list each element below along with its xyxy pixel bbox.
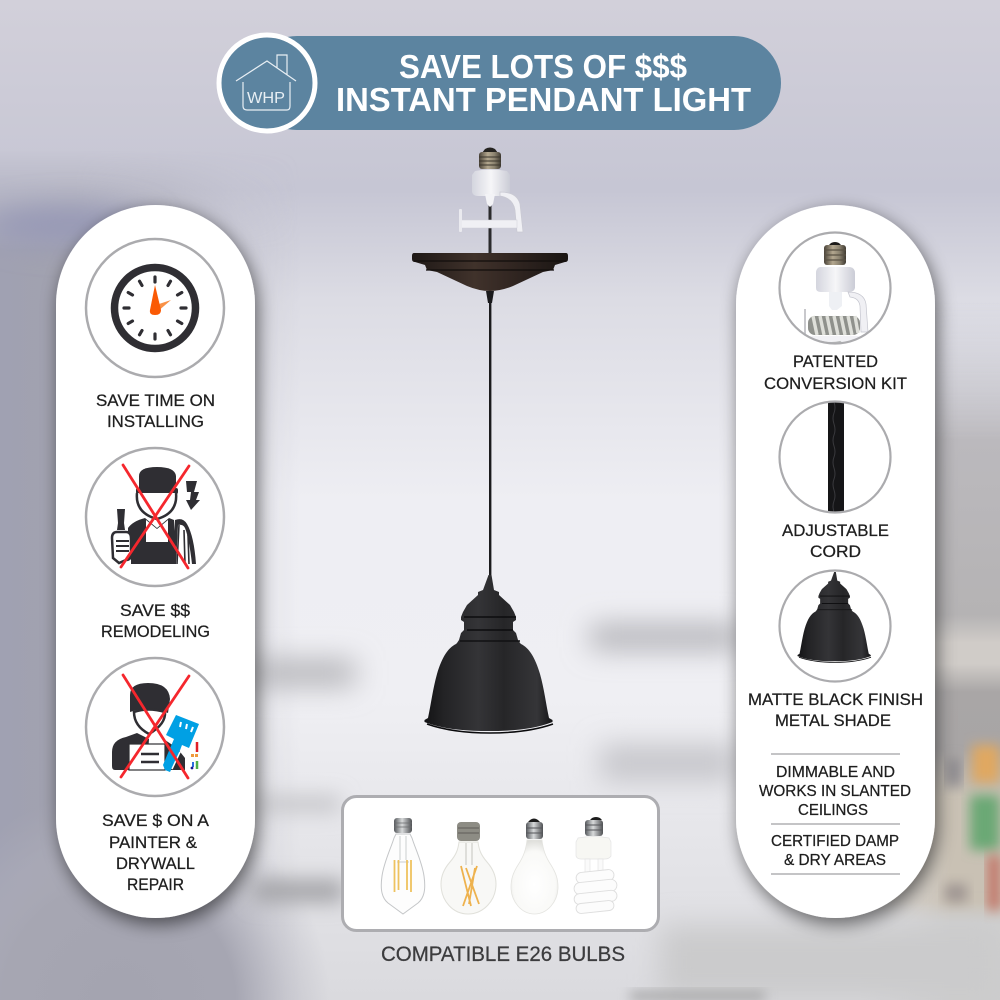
icon: frosted bulb (511, 818, 558, 914)
text: conversion kit: CONVERSION KIT (764, 374, 907, 393)
panel background (56, 205, 255, 918)
text: save remodeling: REMODELING (101, 622, 210, 641)
text: save time: SAVE TIME ON (96, 391, 215, 410)
text: conversion kit (764, 352, 907, 393)
cord (489, 300, 491, 576)
logo: WHP house (219, 35, 315, 131)
icon: clock (86, 239, 224, 377)
text: cord (782, 521, 889, 561)
text: save time (96, 391, 215, 431)
icon: clear A bulb (441, 822, 496, 914)
panel: savings (56, 205, 255, 918)
panel: compatible bulbs (342, 796, 658, 966)
canopy (412, 253, 568, 303)
text: finish: METAL SHADE (775, 711, 891, 730)
icon: metal shade (780, 570, 890, 682)
text: cord: CORD (810, 542, 861, 561)
text: finish: MATTE BLACK FINISH (748, 690, 923, 709)
banner pill (250, 36, 781, 130)
title: SAVE LOTS OF $$$ (399, 48, 687, 85)
text: dimmable (759, 754, 911, 819)
text: conversion kit: PATENTED (793, 352, 878, 371)
conversion socket (459, 148, 523, 255)
text: dimmable: DIMMABLE AND (776, 764, 895, 781)
text: save painter: DRYWALL (116, 854, 195, 873)
icon: vintage filament bulb (381, 818, 425, 914)
product: pendant lamp (412, 148, 568, 733)
text: finish (748, 690, 923, 730)
text: certified: & DRY AREAS (784, 852, 886, 869)
panel: features (736, 205, 935, 918)
icon: crossed electrician (86, 448, 224, 586)
panel background (736, 205, 935, 918)
text: save painter: PAINTER & (109, 833, 197, 852)
title (336, 48, 751, 118)
text: dimmable: CEILINGS (798, 802, 868, 819)
icon: cord (780, 401, 890, 513)
text: certified: CERTIFIED DAMP (771, 833, 899, 850)
header banner (219, 35, 781, 131)
text: save remodeling: SAVE $$ (120, 601, 191, 620)
logo: WHP house: WHP (247, 90, 285, 107)
icon: crossed painter (86, 658, 224, 796)
shade (424, 575, 553, 733)
title: INSTANT PENDANT LIGHT (336, 81, 751, 118)
text: dimmable: WORKS IN SLANTED (759, 783, 911, 800)
text: cord: ADJUSTABLE (782, 521, 889, 540)
text: save painter: REPAIR (127, 875, 184, 894)
bulb box (342, 796, 658, 930)
text: save painter: SAVE $ ON A (102, 811, 210, 830)
text: save time: INSTALLING (107, 412, 204, 431)
icon: conversion kit (780, 232, 890, 350)
text: compatible bulbs: COMPATIBLE E26 BULBS (381, 943, 625, 966)
text: save painter (102, 811, 210, 894)
text: certified (771, 824, 900, 874)
icon: spiral CFL bulb (573, 817, 618, 914)
text: save remodeling (101, 601, 210, 641)
